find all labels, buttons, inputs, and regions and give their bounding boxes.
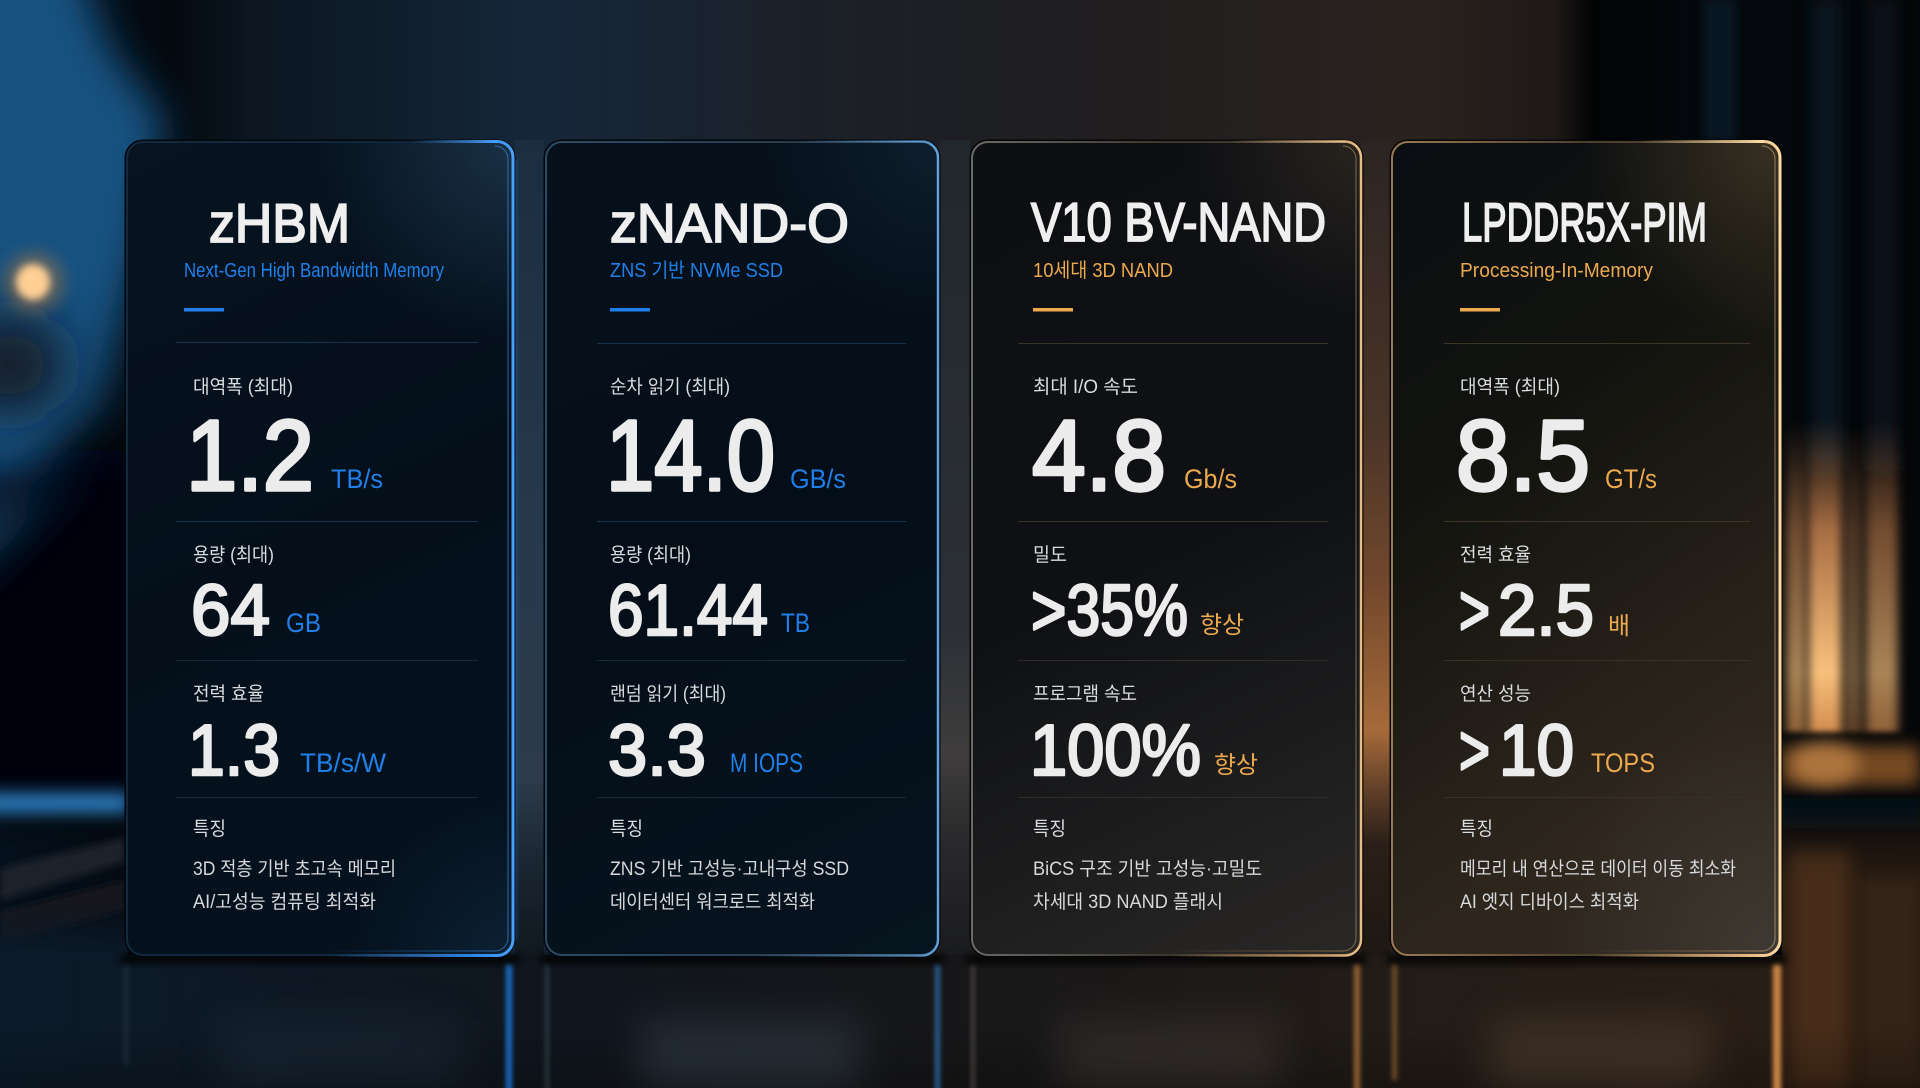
card frame <box>1391 141 1781 956</box>
metric: power efficiency <box>1459 544 1630 651</box>
panel: zHBM <box>126 141 515 956</box>
metric: random read: 3.3 <box>608 711 706 791</box>
metric: bandwidth: GT/s <box>1605 464 1657 494</box>
accent bar <box>1460 308 1500 312</box>
metric: density: >35% <box>1031 571 1188 651</box>
features <box>1033 818 1262 913</box>
subtitle: Next-Gen High Bandwidth Memory <box>184 260 444 282</box>
metric: sequential read <box>606 376 846 512</box>
floor with reflections <box>0 800 1920 1088</box>
metric: capacity: 64 <box>191 571 270 651</box>
metric: bandwidth: 8.5 <box>1456 400 1590 512</box>
metric: program speed: 프로그램 속도 <box>1033 683 1137 705</box>
card frame <box>126 141 515 956</box>
background: warm vertical light stripes <box>1782 420 1920 828</box>
metric: compute performance: TOPS <box>1591 748 1655 778</box>
metric: sequential read: GB/s <box>790 464 846 494</box>
features: 메모리 내 연산으로 데이터 이동 최소화 <box>1460 858 1736 880</box>
metric: power efficiency: 전력 효율 <box>193 683 264 705</box>
metric: program speed: 향상 <box>1214 752 1258 779</box>
metric: max I/O speed: Gb/s <box>1184 464 1237 494</box>
features <box>1460 818 1736 913</box>
metric: max I/O speed <box>1032 376 1237 512</box>
metric: compute performance <box>1459 683 1655 791</box>
features: ZNS 기반 고성능·고내구성 SSD <box>610 858 849 880</box>
metric: bandwidth: TB/s <box>331 464 383 494</box>
metric: bandwidth: 대역폭 (최대) <box>1460 376 1560 398</box>
metric: compute performance: 10 <box>1499 711 1574 791</box>
metric: power efficiency <box>188 683 386 791</box>
features: 3D 적층 기반 초고속 메모리 <box>193 858 396 880</box>
panel: zNAND-O <box>545 141 939 956</box>
title: zNAND-O <box>610 192 849 254</box>
features <box>610 818 849 913</box>
metric: bandwidth: 대역폭 (최대) <box>193 376 293 398</box>
features: 특징 <box>1033 818 1066 840</box>
metric: max I/O speed: 최대 I/O 속도 <box>1033 376 1138 398</box>
metric: random read: M IOPS <box>730 748 803 778</box>
features: 특징 <box>193 818 226 840</box>
subtitle: Processing-In-Memory <box>1460 260 1653 282</box>
features: AI/고성능 컴퓨팅 최적화 <box>193 891 376 913</box>
metric: density <box>1031 544 1244 651</box>
metric: compute performance: > <box>1459 711 1490 791</box>
card frame <box>971 141 1362 956</box>
metric: program speed: 100% <box>1030 711 1201 791</box>
metric: capacity: 용량 (최대) <box>193 544 274 566</box>
metric: capacity: 61.44 <box>608 571 768 651</box>
subtitle: ZNS 기반 NVMe SSD <box>610 259 783 282</box>
metric: power efficiency: > <box>1459 571 1490 651</box>
metric: compute performance: 연산 성능 <box>1460 683 1531 705</box>
metric: density: 향상 <box>1200 612 1244 639</box>
metric: capacity: TB <box>781 608 810 638</box>
panel: V10 BV-NAND <box>971 141 1362 956</box>
features: BiCS 구조 기반 고성능·고밀도 <box>1033 858 1262 880</box>
metric: program speed <box>1030 683 1258 791</box>
panel: LPDDR5X-PIM <box>1391 141 1781 956</box>
accent bar <box>1033 308 1073 312</box>
accent bar <box>610 308 650 312</box>
background: left desk objects <box>0 793 130 945</box>
title: LPDDR5X-PIM <box>1462 191 1707 253</box>
metric: power efficiency: 전력 효율 <box>1460 544 1531 566</box>
metric: random read <box>608 683 803 791</box>
metric: bandwidth <box>186 376 383 512</box>
metric: bandwidth: 1.2 <box>186 400 314 512</box>
metric: density: 밀도 <box>1033 544 1067 566</box>
metric: random read: 랜덤 읽기 (최대) <box>610 683 726 705</box>
title: zHBM <box>209 192 350 254</box>
features: 특징 <box>1460 818 1493 840</box>
features: AI 엣지 디바이스 최적화 <box>1460 891 1639 913</box>
title: V10 BV-NAND <box>1031 191 1326 253</box>
features: 차세대 3D NAND 플래시 <box>1033 891 1223 913</box>
features: 데이터센터 워크로드 최적화 <box>610 891 815 913</box>
metric: capacity: 용량 (최대) <box>610 544 691 566</box>
metric: power efficiency: 1.3 <box>188 711 280 791</box>
metric: bandwidth <box>1456 376 1657 512</box>
accent bar <box>184 308 224 312</box>
metric: sequential read: 순차 읽기 (최대) <box>610 376 730 398</box>
features: 특징 <box>610 818 643 840</box>
metric: capacity <box>191 544 321 651</box>
features <box>193 818 396 913</box>
metric: sequential read: 14.0 <box>606 400 775 512</box>
subtitle: 10세대 3D NAND <box>1033 259 1173 282</box>
metric: power efficiency: 배 <box>1608 613 1630 640</box>
metric: capacity: GB <box>286 608 321 638</box>
metric: power efficiency: 2.5 <box>1498 571 1594 651</box>
metric: capacity <box>608 544 810 651</box>
metric: power efficiency: TB/s/W <box>300 748 386 778</box>
card frame <box>545 141 939 956</box>
metric: max I/O speed: 4.8 <box>1032 400 1166 512</box>
